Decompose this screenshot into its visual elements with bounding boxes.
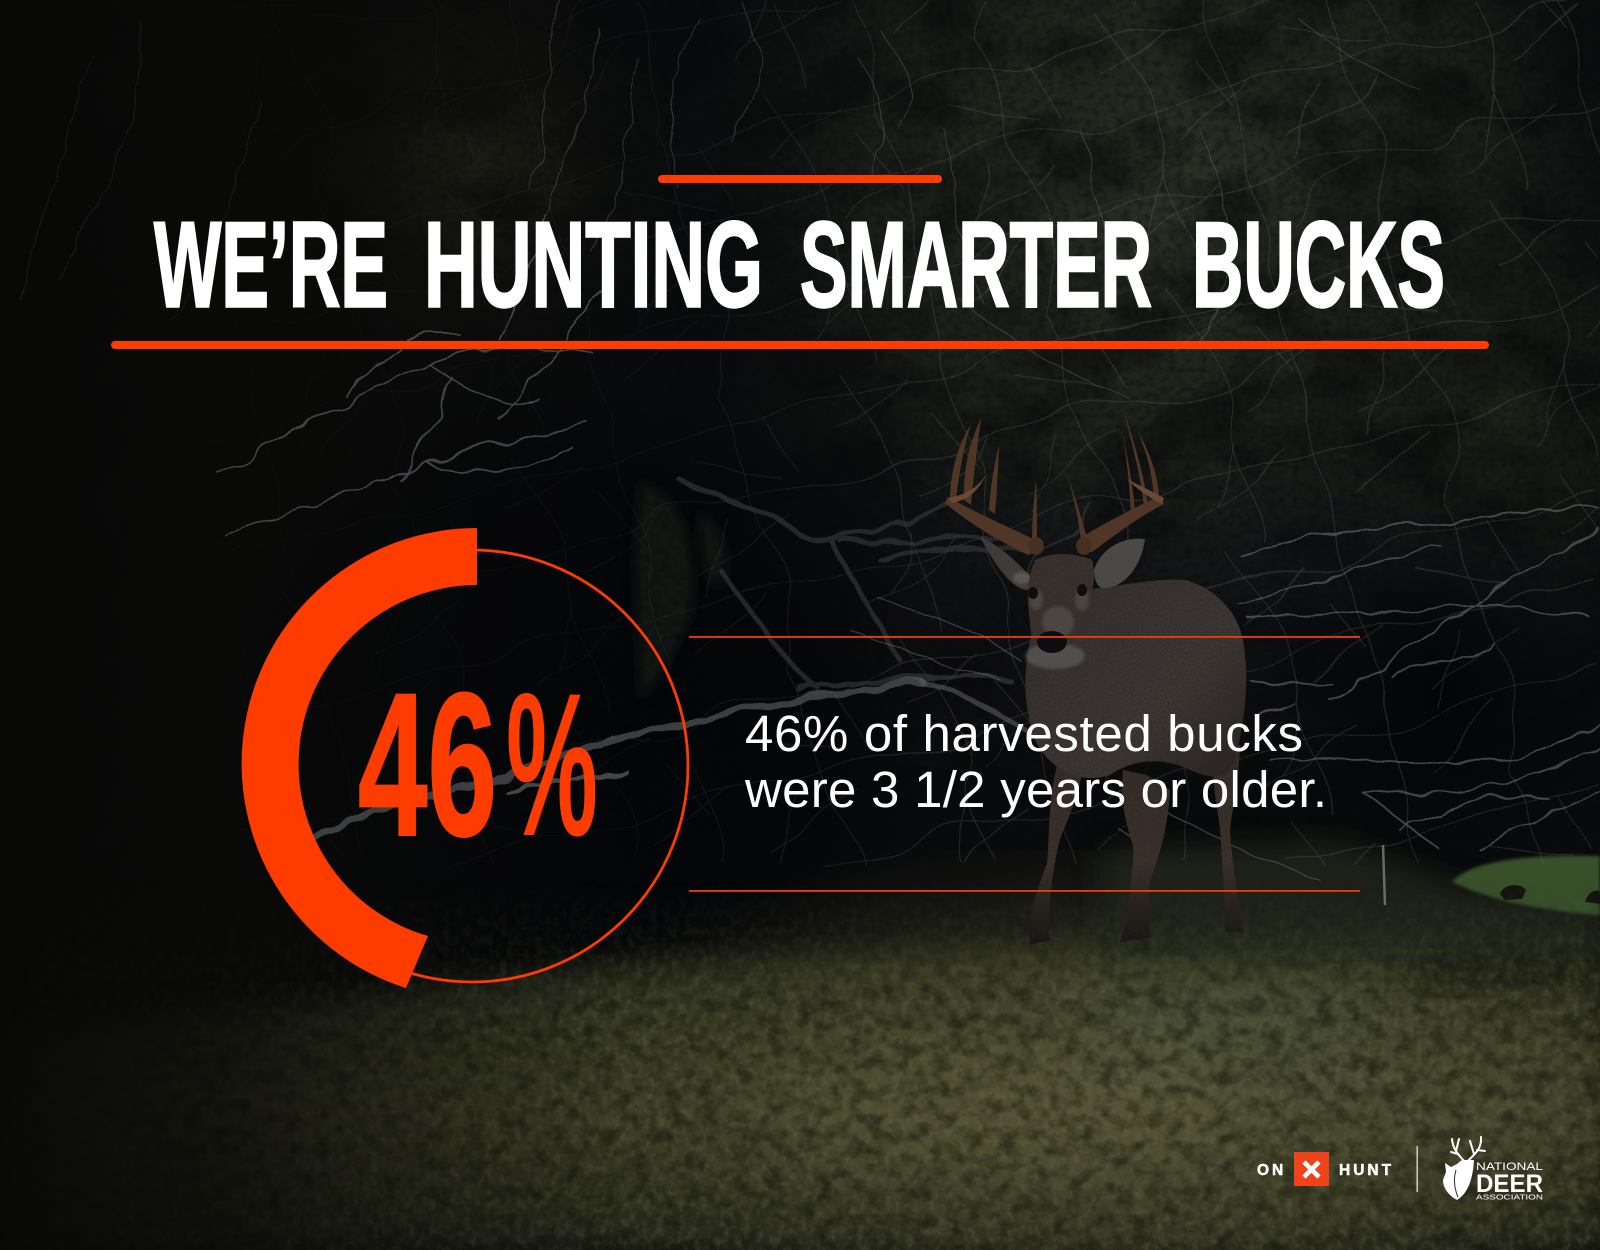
logo: onX Hunt [1257, 1152, 1394, 1186]
donut value label: 46 [358, 651, 497, 879]
title: HUNTING [424, 196, 763, 332]
divider between logos [1416, 1146, 1418, 1192]
title: SMARTER [800, 196, 1152, 332]
deer [945, 412, 1246, 945]
logo: National Deer Association: NATIONAL [1476, 1161, 1543, 1173]
statement block [689, 636, 1360, 892]
background: dense twig texture [538, 0, 1600, 867]
icon: deer ears [980, 537, 1145, 590]
rule: top accent bar [658, 175, 942, 183]
statement text: were 3 1/2 years or older. [744, 761, 1327, 818]
rule: statement top [689, 636, 1360, 638]
background: dead stump [1383, 845, 1385, 905]
rule: title underline [111, 341, 1489, 349]
icon: deer antlers [945, 412, 1164, 555]
chart: 46% donut [242, 528, 688, 988]
title: WE’RE [154, 196, 388, 332]
logo: National Deer Association: ASSOCIATION [1476, 1192, 1543, 1202]
rule: statement bottom [689, 890, 1360, 892]
statement text: 46% of harvested bucks [745, 705, 1303, 762]
donut track [256, 550, 688, 982]
logo: National Deer Association: DEER [1476, 1170, 1543, 1198]
icon: deer head [1028, 554, 1094, 668]
logo: onX Hunt: HUNT [1339, 1162, 1394, 1179]
donut value arc [242, 528, 477, 988]
icon: deer legs [1028, 745, 1244, 945]
logo: National Deer Association [1443, 1137, 1543, 1202]
logo: onX Hunt: ON [1257, 1162, 1286, 1179]
background: bare branches [20, 0, 1600, 880]
icon: deer body [1025, 580, 1246, 778]
donut value label: % [506, 651, 598, 879]
